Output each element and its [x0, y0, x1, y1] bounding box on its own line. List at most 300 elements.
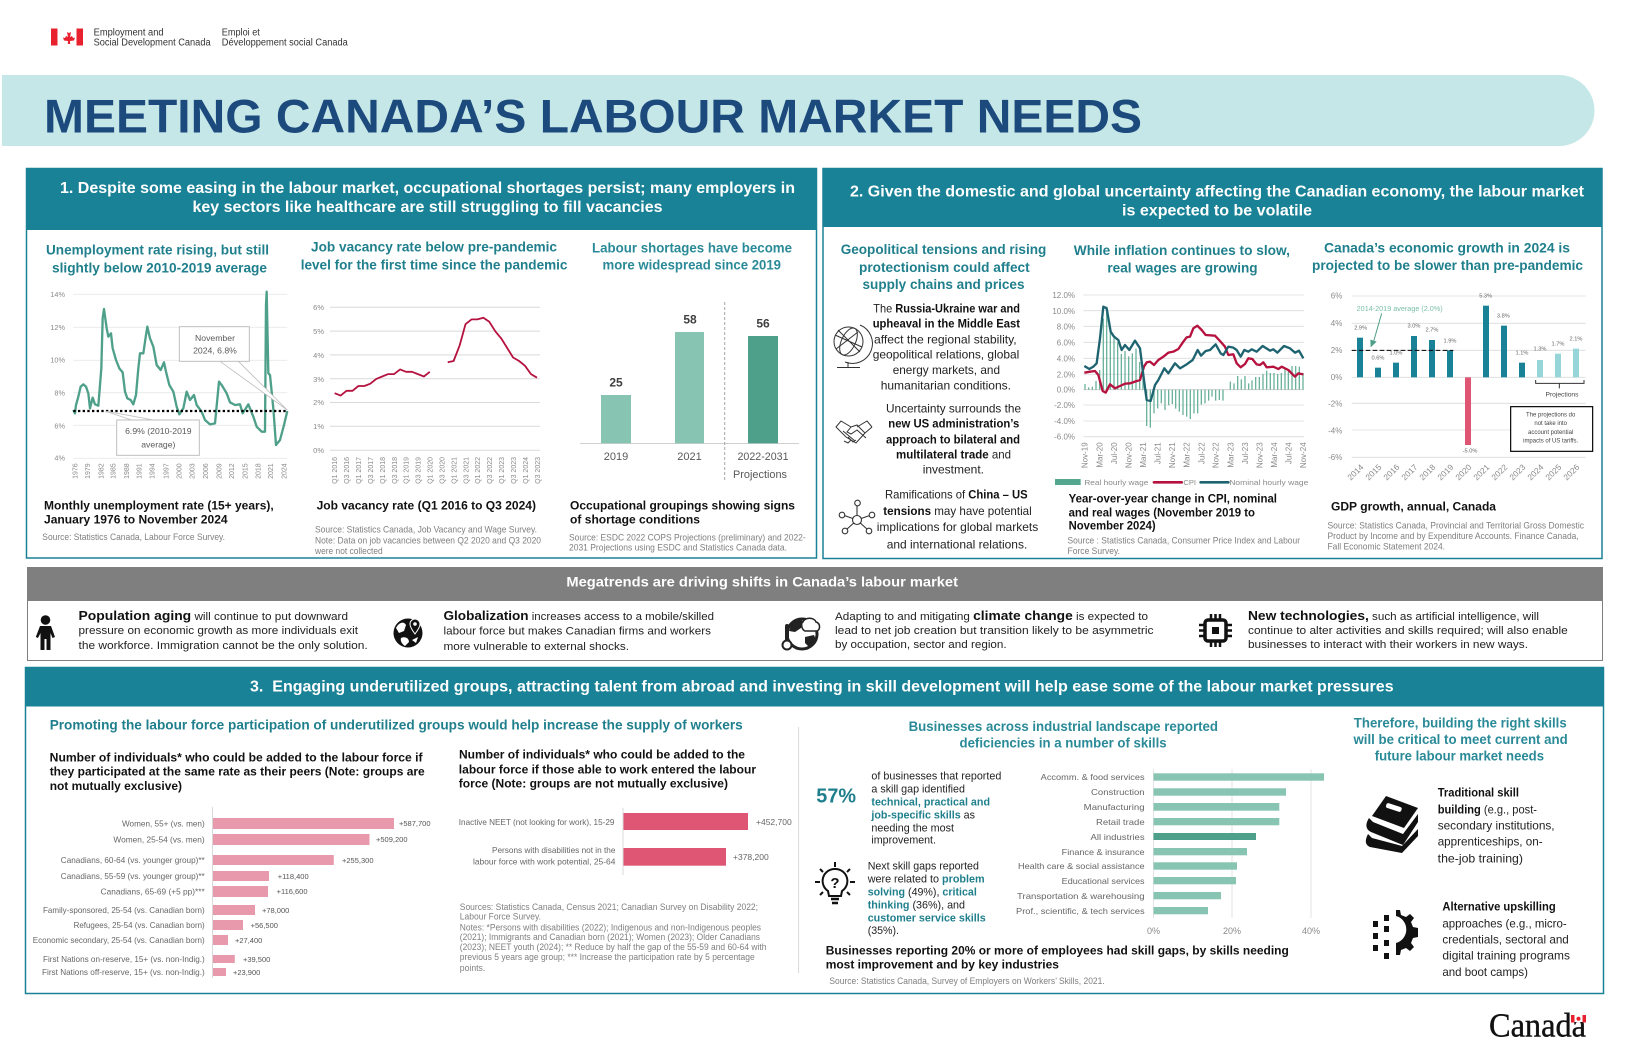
caption: CPI and wages — [1068, 492, 1300, 557]
bar chart: occupational groupings — [580, 302, 799, 481]
legend: Real hourly wage — [1084, 478, 1148, 487]
heading: skill deficiencies — [909, 718, 1218, 751]
bar chart: GDP growth: 1.7% — [1552, 342, 1564, 348]
caption: GDP growth — [1328, 500, 1584, 552]
caption: GDP growth: Source: Statistics Canada, Provincial and Territorial Gross Domestic — [1328, 521, 1584, 532]
line chart: unemployment rate: 2006 — [203, 463, 210, 479]
line chart: job vacancy rate: 4% — [313, 351, 324, 360]
line chart: job vacancy rate: Q1 2018 — [380, 457, 387, 484]
line chart: unemployment rate: 1991 — [137, 463, 144, 479]
text: US administration: new US administration’s — [888, 417, 1020, 431]
bar chart: participation at peer rate: +587,700 — [399, 819, 430, 828]
caption: GDP growth: Fall Economic Statement 2024. — [1328, 541, 1445, 552]
text: alternative upskilling: approaches (e.g., micro- — [1442, 916, 1567, 930]
chart: CPI and wages: -6.0% — [1054, 433, 1075, 442]
bar chart: GDP growth: Projections — [1546, 392, 1579, 399]
line chart: job vacancy rate: Q3 2022 — [487, 457, 494, 484]
heading: building skills — [1353, 714, 1568, 764]
bar chart: GDP growth: 2.1% — [1570, 336, 1582, 342]
line chart: job vacancy rate — [313, 303, 542, 484]
text: alternative upskilling: digital training programs — [1442, 948, 1570, 962]
chart: CPI and wages: -4.0% — [1054, 417, 1075, 426]
text: next skill gaps: solving (49%), critical — [868, 886, 977, 898]
chart: CPI and wages: Mar-20 — [1095, 442, 1104, 468]
line chart: unemployment rate: 2024 — [281, 463, 288, 479]
line chart: job vacancy rate: 0% — [313, 446, 324, 455]
bar chart: GDP growth: 1.1% — [1516, 350, 1528, 356]
caption: GDP growth: GDP growth, annual, Canada — [1331, 500, 1496, 514]
caption: job vacancy: Source: Statistics Canada, Job Vacancy and Wage Survey. — [315, 525, 537, 536]
bar chart: skill gaps by industry: Health care & social assistance — [1018, 861, 1145, 871]
chart: CPI and wages: Nov-24 — [1299, 442, 1308, 468]
caption: skill gaps: most improvement and by key industries — [826, 957, 1059, 971]
bar chart: skill gaps by industry: All industries — [1090, 832, 1145, 842]
text: US administration: Uncertainty surrounds the — [886, 401, 1021, 415]
bar chart: GDP growth: 2014 — [1345, 462, 1366, 482]
chart: CPI and wages: Mar-24 — [1270, 442, 1279, 468]
line chart: job vacancy rate: Q3 2019 — [416, 457, 422, 484]
text: globalization: labour force but makes Canadian firms and workers — [444, 626, 712, 638]
text: Russia-Ukraine — [873, 302, 1020, 392]
icon: handshake — [836, 421, 872, 443]
bar chart: GDP growth: 3.0% — [1408, 324, 1420, 330]
chart: CPI and wages: 2.0% — [1057, 370, 1075, 379]
line chart: unemployment rate: 1988 — [124, 463, 131, 479]
heading: job vacancy: level for the first time since the pandemic — [301, 256, 568, 272]
bar chart: GDP growth: -6% — [1328, 453, 1342, 462]
line chart: job vacancy rate: Q3 2020 — [440, 457, 446, 484]
chart title: peers: they participated at the same rate as their peers (Note: groups are — [50, 765, 425, 779]
note box: tariffs: account potential — [1528, 430, 1573, 436]
text: next skill gaps: thinking (36%), and — [868, 899, 965, 911]
bar chart: NEET and disabilities: Persons with disabilities not in the — [492, 845, 616, 855]
line chart: unemployment rate: 12% — [50, 323, 65, 332]
heading: geopolitical: protectionism could affect — [859, 259, 1030, 275]
heading: inflation — [1074, 242, 1290, 276]
bar chart: GDP growth: 2018 — [1417, 462, 1438, 482]
text: alternative upskilling: and boot camps) — [1442, 965, 1528, 979]
panel 2: uncertainty — [822, 168, 1602, 558]
chart: CPI and wages: Nov-20 — [1124, 442, 1133, 468]
stat: 57%: a skill gap identified — [871, 784, 965, 796]
line chart: job vacancy rate: Q1 2020 — [428, 457, 434, 484]
title band — [2, 75, 1594, 146]
panel 3 header: 3. Engaging underutilized groups, attracting talent from abroad and investing in skill development will help ease some of the labour market pressures — [250, 678, 1394, 696]
line chart: job vacancy rate: Q1 2024 — [523, 457, 530, 484]
heading: GDP growth: projected to be slower than pre-pandemic — [1312, 257, 1583, 273]
bar chart: occupational groupings: 58 — [683, 312, 697, 326]
line chart: unemployment rate — [50, 290, 288, 479]
chart: CPI and wages: Nov-22 — [1212, 442, 1221, 468]
stat: 57%: needing the most — [871, 822, 954, 834]
ESDC logo signature: Social Development Canada — [94, 37, 211, 48]
panel 1: occupational shortages — [26, 168, 817, 558]
chart title: entered labour force — [459, 747, 756, 791]
bar chart: occupational groupings: Projections — [733, 469, 787, 481]
bar chart: skill gaps by industry — [1016, 769, 1324, 936]
icon: globe on stand — [834, 325, 872, 368]
text: traditional skill building — [1438, 786, 1555, 865]
caption: job vacancy: Note: Data on job vacancies between Q2 2020 and Q3 2020 — [315, 535, 541, 546]
caption: job vacancy: were not collected — [314, 546, 383, 557]
callout: 2010-2019 average: average) — [141, 439, 176, 449]
text: climate change — [835, 608, 1154, 651]
bar chart: GDP growth — [1328, 292, 1593, 482]
caption: occupational groupings: 2031 Projections using ESDC and Statistics Canada data. — [569, 543, 787, 554]
text: globalization: more vulnerable to external shocks. — [444, 641, 629, 653]
panel 3: engaging underutilized groups — [25, 668, 1604, 994]
bar chart: participation at peer rate: +39,500 — [243, 955, 270, 964]
line chart: unemployment rate: 1982 — [98, 463, 105, 479]
text: next skill gaps: (35%). — [868, 925, 899, 937]
bar chart: GDP growth: -5.0% — [1463, 449, 1477, 455]
stat: 57%: job-specific skills as — [870, 809, 975, 821]
sources and notes: (2021); Immigrants and Canadian born (2021); Women (2023); Older Canadians — [460, 932, 760, 943]
heading: labour shortages: Labour shortages have become — [592, 240, 792, 256]
icon: light bulb with question mark: ? — [830, 875, 840, 892]
ESDC logo signature — [51, 28, 348, 48]
panel 3 header — [25, 668, 1604, 706]
chart: CPI and wages: Jul-24 — [1285, 442, 1294, 464]
ESDC logo signature: Développement social Canada — [222, 37, 348, 48]
heading: skill deficiencies: Businesses across industrial landscape reported — [909, 718, 1218, 734]
panel 2 header: 2. Given the domestic and global uncertainty affecting the Canadian economy, the labour market — [850, 184, 1585, 201]
bar chart: participation at peer rate: +23,900 — [233, 968, 260, 977]
caption: occupational groupings — [569, 498, 806, 554]
sources and notes: Notes: *Persons with disabilities (2022); Indigenous and non-Indigenous peoples — [460, 923, 761, 934]
line chart: job vacancy rate: 5% — [313, 327, 324, 336]
bar chart: GDP growth: 2025 — [1543, 462, 1564, 482]
caption: skill gaps — [826, 943, 1289, 987]
line: CPI — [1084, 326, 1303, 393]
bar chart: GDP growth: 6% — [1331, 292, 1342, 301]
line chart: job vacancy rate: Q3 2023 — [535, 457, 542, 484]
line chart: job vacancy rate: Q1 2022 — [475, 457, 482, 484]
line chart: job vacancy rate: Q3 2021 — [464, 457, 470, 484]
caption: occupational groupings: of shortage conditions — [570, 512, 700, 526]
heading: building skills: Therefore, building the right skills — [1354, 714, 1567, 730]
chart: CPI and wages: Mar-21 — [1139, 442, 1148, 468]
icon: chip — [1199, 614, 1232, 647]
bar chart: skill gaps by industry: Accomm. & food services — [1041, 772, 1145, 782]
bar chart: participation at peer rate: Economic secondary, 25-54 (vs. Canadian born) — [33, 935, 205, 945]
text: next skill gaps — [867, 860, 986, 937]
stat: 57%: technical, practical and — [871, 797, 990, 809]
text: traditional skill building: the-job training) — [1438, 851, 1523, 865]
chart: CPI and wages: 10.0% — [1052, 307, 1075, 316]
bar chart: NEET and disabilities: +378,200 — [733, 852, 769, 862]
heading: unemployment: Unemployment rate rising, but still — [46, 242, 269, 258]
bar chart: participation at peer rate: +118,400 — [278, 872, 309, 881]
line chart: unemployment rate: 1985 — [111, 463, 118, 479]
text: traditional skill building: building (e.g., post- — [1438, 802, 1537, 816]
text: Russia-Ukraine: upheaval in the Middle East — [873, 316, 1020, 330]
text: Russia-Ukraine: humanitarian conditions. — [881, 378, 1011, 392]
heading: job vacancy — [301, 239, 568, 272]
caption: job vacancy — [314, 498, 541, 557]
text: Russia-Ukraine: affect the regional stability, — [874, 332, 1017, 346]
text: climate change: lead to net job creation but transition likely to be asymmetric — [835, 625, 1154, 637]
bar chart: GDP growth: -2% — [1328, 399, 1342, 408]
callout: November 2024 — [179, 327, 287, 410]
sources and notes: Labour Force Survey. — [460, 911, 541, 922]
note box: tariffs — [1511, 407, 1593, 451]
title band: MEETING CANADA’S LABOUR MARKET NEEDS — [44, 90, 1142, 143]
line chart: unemployment rate: 2000 — [177, 463, 184, 479]
bar chart: participation at peer rate: Canadians, 55-59 (vs. younger group)** — [61, 871, 205, 881]
chart: CPI and wages: Jul-20 — [1110, 442, 1119, 464]
line chart: unemployment rate: 2021 — [268, 463, 275, 479]
text: China-US tensions: tensions may have potential — [883, 504, 1032, 518]
caption: occupational groupings: Occupational groupings showing signs — [570, 498, 795, 512]
line chart: job vacancy rate: Q1 2017 — [356, 457, 363, 484]
panel 2 header: is expected to be volatile — [1122, 203, 1312, 220]
caption: GDP growth: Product by Income and by Expenditure Accounts. Finance Canada, — [1328, 531, 1579, 542]
bar chart: NEET and disabilities: Inactive NEET (not looking for work), 15-29 — [459, 817, 615, 827]
bar chart: GDP growth: 2019 — [1435, 462, 1456, 482]
bar chart: NEET and disabilities: +452,700 — [756, 817, 792, 827]
line chart: job vacancy rate: Q3 2023 — [511, 457, 518, 484]
legend: CPI — [1183, 478, 1196, 487]
bar chart: participation at peer rate: +509,200 — [376, 835, 408, 844]
line chart: unemployment rate: 2018 — [256, 463, 263, 479]
stat: 57%: of businesses that reported — [871, 770, 1001, 782]
callout: November 2024: November — [195, 333, 235, 343]
bar chart: GDP growth: 2015 — [1363, 462, 1384, 482]
panel 1 header — [26, 168, 817, 230]
text: population aging — [78, 608, 368, 652]
chart: CPI and wages: Nov-19 — [1081, 442, 1090, 468]
callout: 2010-2019 average: 6.9% (2010-2019 — [125, 426, 192, 436]
Canada wordmark: Canada — [1489, 1008, 1586, 1045]
bar chart: NEET and disabilities — [459, 808, 792, 875]
line chart: job vacancy rate: 3% — [313, 375, 324, 384]
heading: GDP growth: Canada’s economic growth in 2024 is — [1324, 240, 1570, 256]
bar chart: skill gaps by industry: Prof., scientific, & tech services — [1016, 906, 1145, 916]
line chart: job vacancy rate: 2% — [313, 398, 324, 407]
heading: skill deficiencies: deficiencies in a number of skills — [960, 735, 1167, 751]
heading: unemployment — [46, 242, 269, 276]
heading: building skills: future labour market needs — [1375, 748, 1544, 764]
text: Russia-Ukraine: geopolitical relations, global — [873, 347, 1019, 361]
sources and notes — [460, 902, 766, 974]
chart title: entered labour force: force (Note: groups are not mutually exclusive) — [459, 777, 728, 791]
panel 2 header — [822, 168, 1602, 227]
bar chart: participation at peer rate: First Nations on-reserve, 15+ (vs. non-Indig.) — [43, 954, 205, 964]
panel: megatrends — [27, 567, 1603, 660]
bar chart: GDP growth: -4% — [1328, 426, 1342, 435]
legend: Nominal hourly wage — [1229, 478, 1308, 487]
bar chart: participation at peer rate: +27,400 — [235, 936, 262, 945]
caption: unemployment: January 1976 to November 2024 — [44, 512, 228, 526]
line chart: unemployment rate: 1997 — [163, 463, 170, 479]
bar chart: skill gaps by industry: Retail trade — [1096, 817, 1145, 827]
bar chart: NEET and disabilities: labour force with work potential, 25-64 — [473, 856, 616, 866]
line chart: unemployment rate: 1976 — [72, 463, 79, 479]
text: Russia-Ukraine: The Russia-Ukraine war and — [873, 302, 1020, 316]
line chart: job vacancy rate: Q3 2016 — [344, 457, 351, 484]
bar chart: skill gaps by industry: 0% — [1147, 926, 1160, 936]
text: climate change: Adapting to and mitigating climate change is expected to — [835, 608, 1148, 623]
bar chart: GDP growth: 2.7% — [1426, 328, 1438, 334]
panel 1 header: key sectors like healthcare are still struggling to fill vacancies — [192, 199, 663, 216]
heading: building skills: will be critical to meet current and — [1353, 731, 1568, 747]
heading: GDP growth — [1312, 240, 1583, 273]
bar chart: GDP growth: 2016 — [1381, 462, 1402, 482]
text: traditional skill building: secondary institutions, — [1438, 818, 1555, 832]
bar chart: participation at peer rate: +56,500 — [251, 921, 278, 930]
bar chart: skill gaps by industry: Educational services — [1062, 876, 1145, 886]
text: traditional skill building: Traditional skill — [1438, 786, 1519, 800]
line chart: job vacancy rate: Q3 2018 — [392, 457, 399, 484]
bar chart: participation at peer rate: +116,600 — [277, 887, 308, 896]
chart: CPI and wages: Mar-22 — [1183, 442, 1192, 468]
line chart: unemployment rate: 4% — [54, 454, 65, 463]
bar chart: skill gaps by industry: Manufacturing — [1084, 802, 1145, 812]
bar chart: GDP growth: 2023 — [1507, 462, 1528, 482]
stat: 57%: 57% — [816, 786, 856, 808]
text: US administration — [886, 401, 1021, 476]
megatrends header: Megatrends are driving shifts in Canada’s labour market — [566, 574, 958, 590]
text: China-US tensions: and international relations. — [887, 537, 1027, 551]
bar chart: skill gaps by industry: Finance & insurance — [1062, 847, 1145, 857]
chart title: peers — [50, 751, 425, 793]
arrow: average — [1370, 313, 1382, 347]
text: alternative upskilling: credentials, sectoral and — [1442, 932, 1569, 946]
line chart: unemployment rate: 2003 — [190, 463, 197, 479]
line chart: unemployment rate: 1979 — [85, 463, 92, 479]
bar chart: participation at peer rate — [33, 807, 431, 978]
bar chart: skill gaps by industry: 20% — [1223, 926, 1241, 936]
line chart: unemployment rate: 10% — [50, 356, 65, 365]
chart: CPI and wages: Nov-21 — [1168, 442, 1177, 468]
text: China-US tensions: implications for global markets — [877, 520, 1038, 534]
chart title: entered labour force: Number of individuals* who could be added to the — [459, 747, 745, 761]
sources and notes: (2023); NEET youth (2024); ** Reduce by half the gap of the 55-59 and 60-64 with — [460, 942, 766, 953]
bar chart: participation at peer rate: First Nations off-reserve, 15+ (vs. non-Indig.) — [42, 967, 205, 977]
text: alternative upskilling: Alternative upskilling — [1442, 900, 1556, 914]
icon: climate — [782, 618, 820, 650]
text: climate change: by occupation, sector and region. — [835, 639, 1007, 651]
text: next skill gaps: customer service skills — [868, 912, 986, 924]
sources and notes: points. — [460, 963, 485, 974]
line chart: job vacancy rate: 1% — [313, 422, 324, 431]
bar chart: GDP growth: 3.8% — [1497, 313, 1510, 319]
bar chart: participation at peer rate: Refugees, 25-54 (vs. Canadian born) — [74, 920, 205, 930]
text: US administration: multilateral trade and — [896, 447, 1011, 461]
note box: tariffs: impacts of US tariffs. — [1523, 438, 1579, 444]
bar chart: GDP growth: 1.0% — [1390, 351, 1402, 357]
bar chart: participation at peer rate: +255,300 — [342, 856, 374, 865]
stat: 57% — [816, 770, 1001, 846]
chart title: entered labour force: labour force if those able to work entered the labour — [459, 762, 756, 776]
caption: CPI and wages: November 2024) — [1069, 518, 1156, 532]
heading: job vacancy: Job vacancy rate below pre-pandemic — [311, 239, 557, 255]
caption: CPI and wages: Force Survey. — [1068, 546, 1120, 557]
megatrends header — [27, 567, 1603, 601]
caption: unemployment — [42, 498, 274, 543]
callout: November 2024: 2024, 6.8% — [193, 345, 237, 355]
line chart: job vacancy rate: 6% — [313, 303, 324, 312]
chart: CPI and wages — [1052, 291, 1308, 487]
bar chart: GDP growth: 2% — [1331, 346, 1342, 355]
bar chart: occupational groupings: 2019 — [604, 451, 628, 463]
bar chart: GDP growth: 5.3% — [1479, 293, 1492, 299]
icon: network — [839, 500, 875, 534]
chart: CPI and wages: Jul-23 — [1241, 442, 1250, 464]
chart: CPI and wages: Jul-21 — [1154, 442, 1163, 464]
note box: tariffs: The projections do — [1526, 413, 1576, 419]
sources and notes: Sources: Statistics Canada, Census 2021; Canadian Survey on Disability 2022; — [460, 902, 758, 913]
text: China-US tensions — [877, 487, 1038, 551]
bar chart: skill gaps by industry: Transportation & warehousing — [1017, 891, 1145, 901]
caption: skill gaps: Source: Statistics Canada, Survey of Employers on Workers’ Skills, 2021. — [829, 976, 1105, 987]
line chart: job vacancy rate: Q3 2017 — [368, 457, 375, 484]
text: traditional skill building: apprenticeships, on- — [1438, 835, 1543, 849]
bar chart: GDP growth: 0% — [1331, 373, 1342, 382]
heading: labour shortages: more widespread since 2019 — [602, 256, 781, 272]
text: globalization: Globalization increases access to a mobile/skilled — [444, 608, 714, 623]
icon: person — [36, 615, 55, 650]
panel 1 header: 1. Despite some easing in the labour market, occupational shortages persist; many employers in — [60, 180, 795, 197]
bar chart: participation at peer rate: Family-sponsored, 25-54 (vs. Canadian born) — [43, 905, 205, 915]
chart: CPI and wages: 8.0% — [1057, 322, 1075, 331]
icon: books — [1366, 796, 1418, 853]
sources and notes: previous 5 years age group; *** Increase the participation rate by 5 percentage — [460, 952, 755, 963]
bar chart: GDP growth: 2020 — [1453, 462, 1474, 482]
bars: real hourly wage — [1085, 307, 1303, 428]
heading: geopolitical — [841, 241, 1046, 292]
line: nominal hourly wage — [1084, 307, 1303, 401]
chart: CPI and wages: 6.0% — [1057, 338, 1075, 347]
line chart: unemployment rate: 2009 — [216, 463, 223, 479]
bar chart: GDP growth: 2.9% — [1354, 325, 1367, 331]
text: globalization — [444, 608, 714, 653]
bar chart: participation at peer rate: Canadians, 65-69 (+5 pp)*** — [101, 886, 205, 896]
bar chart: participation at peer rate: Women, 55+ (vs. men) — [122, 818, 205, 828]
line chart: job vacancy rate: Q1 2019 — [404, 457, 410, 484]
text: next skill gaps: were related to problem — [867, 873, 985, 885]
heading: inflation: While inflation continues to slow, — [1074, 242, 1290, 258]
chart: CPI and wages: Jul-22 — [1197, 442, 1206, 464]
bar chart: GDP growth: 1.3% — [1534, 346, 1546, 352]
line chart: unemployment rate: 1994 — [150, 463, 157, 479]
bar chart: participation at peer rate: Canadians, 60-64 (vs. younger group)** — [61, 855, 205, 865]
caption: CPI and wages: Source : Statistics Canada, Consumer Price Index and Labour — [1068, 535, 1300, 546]
text: alternative upskilling — [1442, 900, 1570, 979]
bar chart: skill gaps by industry: 40% — [1302, 926, 1320, 936]
text: new technologies — [1248, 608, 1568, 651]
caption: CPI and wages: and real wages (November 2019 to — [1069, 506, 1255, 520]
text: Russia-Ukraine: energy markets, and — [893, 363, 1000, 377]
icon: gear with dots — [1373, 910, 1418, 959]
line chart: job vacancy rate: Q1 2016 — [332, 457, 339, 484]
text: new technologies: continue to alter activities and skills required; will also enable — [1248, 625, 1568, 637]
text: population aging: pressure on economic growth as more individuals exit — [78, 625, 358, 637]
chart: CPI and wages: Nov-23 — [1255, 442, 1264, 468]
line chart: unemployment rate: 6% — [54, 421, 65, 430]
chart title: peers: not mutually exclusive) — [50, 779, 182, 793]
line chart: job vacancy rate: Q1 2021 — [452, 457, 458, 484]
bar chart: occupational groupings: 56 — [756, 316, 770, 330]
caption: job vacancy: Job vacancy rate (Q1 2016 to Q3 2024) — [317, 498, 536, 512]
text: population aging: the workforce. Immigration cannot be the only solution. — [78, 640, 368, 652]
caption: skill gaps: Businesses reporting 20% or more of employees had skill gaps, by skills needing — [826, 943, 1289, 957]
bar chart: GDP growth: 1.9% — [1444, 338, 1456, 344]
text: US administration: approach to bilateral and — [886, 432, 1020, 446]
text: population aging: Population aging will continue to put downward — [78, 608, 348, 623]
heading: labour shortages — [592, 240, 792, 272]
